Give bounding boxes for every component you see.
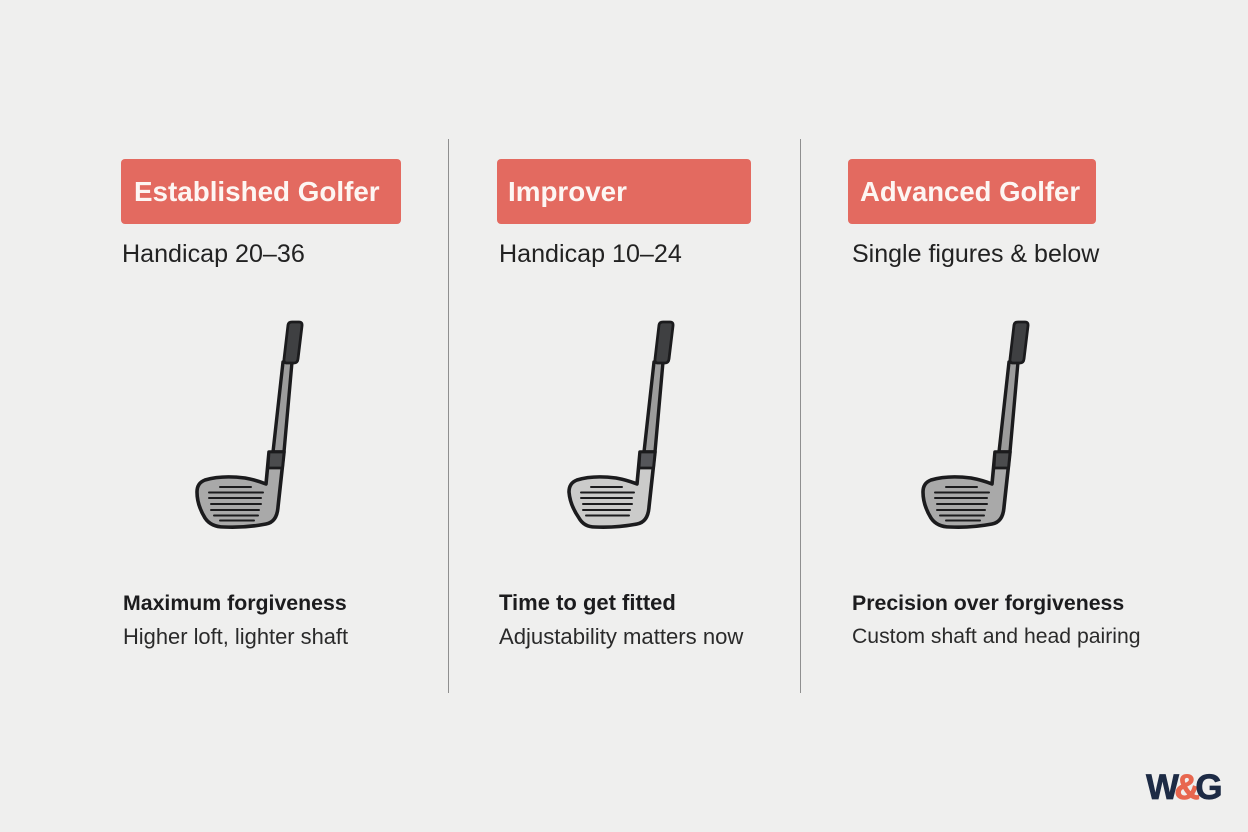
panel: Improver (497, 159, 751, 649)
panel: Established Golfer (121, 159, 401, 649)
badge: Advanced Golfer: Advanced Golfer (860, 176, 1080, 207)
handicap range: Single figures & below (852, 240, 1099, 268)
badge: Established Golfer (121, 159, 401, 224)
badge: Improver: Improver (508, 176, 627, 207)
handicap range: Handicap 10–24 (499, 240, 682, 268)
logo: W&G: W&G (1146, 768, 1220, 807)
benefit heading: Maximum forgiveness (123, 591, 347, 615)
benefit description: Higher loft, lighter shaft (123, 624, 348, 649)
benefit description: Custom shaft and head pairing (852, 625, 1141, 648)
icon: golf iron, Improver (569, 322, 673, 527)
icon: golf iron, Advanced Golfer (923, 322, 1028, 527)
benefit heading: Time to get fitted (499, 590, 676, 615)
benefit heading: Precision over forgiveness (852, 591, 1124, 615)
badge: Advanced Golfer (848, 159, 1096, 224)
badge: Improver (497, 159, 751, 224)
panel: Advanced Golfer (848, 159, 1141, 648)
benefit description: Adjustability matters now (499, 624, 743, 649)
badge: Established Golfer: Established Golfer (134, 176, 380, 207)
handicap range: Handicap 20–36 (122, 240, 305, 268)
icon: golf iron, Established Golfer (197, 322, 302, 527)
